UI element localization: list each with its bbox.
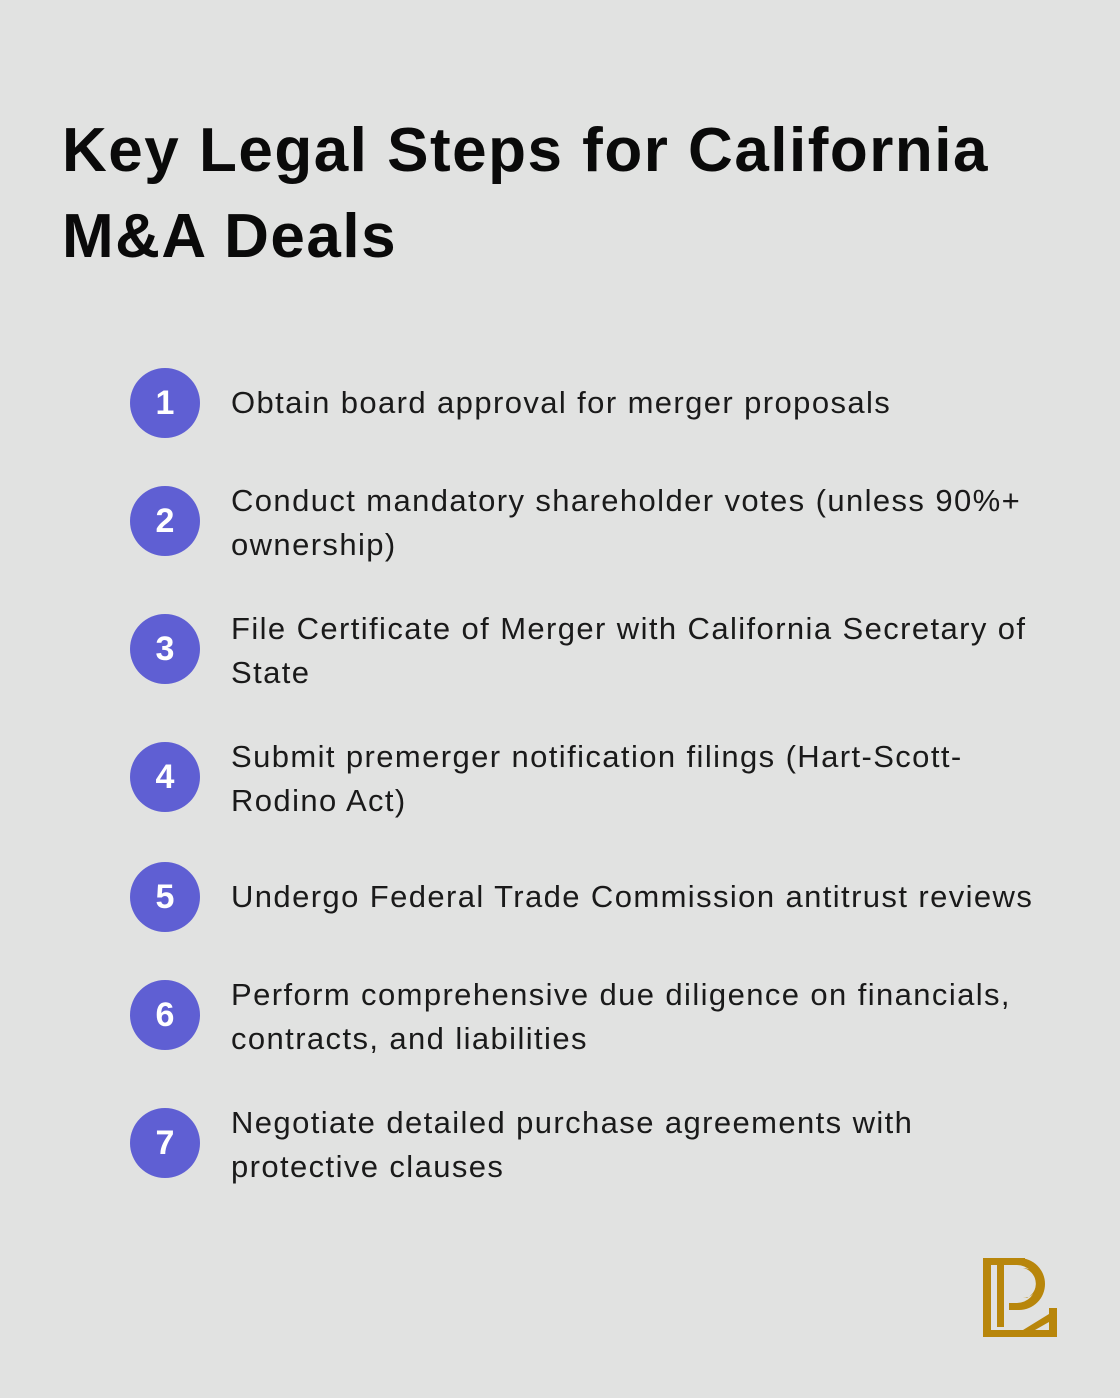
title	[62, 116, 989, 271]
title: Key Legal Steps for California	[62, 116, 989, 185]
step 4: Submit premerger notification filings (Hart-Scott-	[231, 739, 963, 774]
step 7	[130, 1105, 913, 1184]
step 3: 3	[156, 630, 174, 668]
step 6: 6	[156, 996, 174, 1034]
step 3: File Certificate of Merger with California Secretary of	[231, 611, 1026, 646]
step 1: Obtain board approval for merger proposals	[231, 385, 891, 420]
step 7: Negotiate detailed purchase agreements with	[231, 1105, 913, 1140]
step 4	[130, 739, 963, 818]
step 6: Perform comprehensive due diligence on financials,	[231, 977, 1011, 1012]
step 3: State	[231, 655, 310, 690]
step 2: Conduct mandatory shareholder votes (unless 90%+	[231, 483, 1021, 518]
step 7: protective clauses	[231, 1149, 504, 1184]
step 4: 4	[156, 758, 174, 796]
step 6: contracts, and liabilities	[231, 1021, 588, 1056]
step 1	[130, 368, 891, 438]
step 6	[130, 977, 1011, 1056]
step 4: Rodino Act)	[231, 783, 407, 818]
step 3	[130, 611, 1026, 690]
step 5	[130, 862, 1033, 932]
step 2: 2	[156, 502, 174, 540]
step 7: 7	[156, 1124, 174, 1162]
step 5: 5	[156, 878, 174, 916]
title: M&A Deals	[62, 202, 397, 271]
logo	[983, 1258, 1057, 1337]
step 2	[130, 483, 1021, 562]
step 5: Undergo Federal Trade Commission antitrust reviews	[231, 879, 1033, 914]
step 2: ownership)	[231, 527, 397, 562]
step 1: 1	[156, 384, 174, 422]
